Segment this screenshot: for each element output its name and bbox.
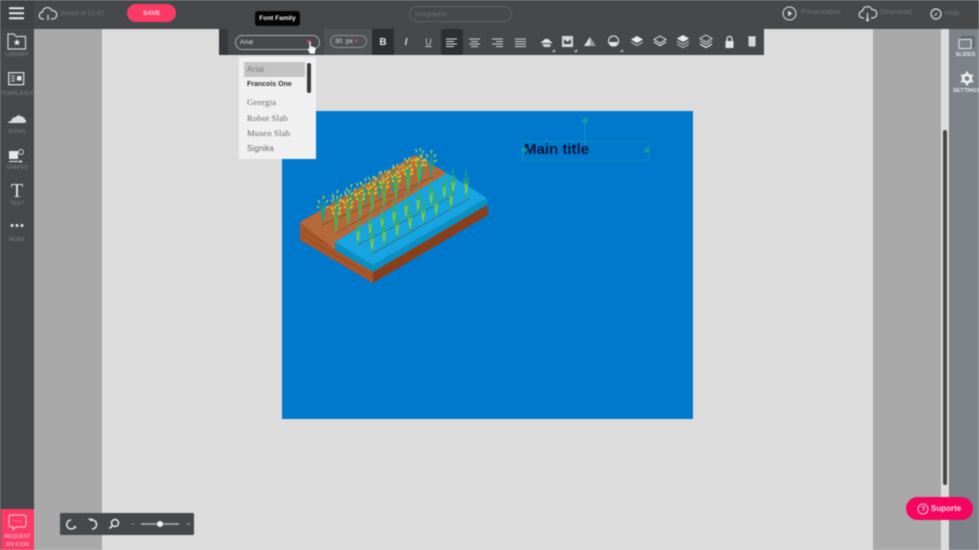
menu corner block	[0, 0, 34, 29]
water top	[335, 173, 487, 265]
save button: SAVE	[143, 10, 160, 17]
title text box	[522, 141, 649, 161]
back row of plants	[317, 150, 437, 222]
icon: image fill	[561, 35, 574, 48]
font size select: 30 px ▾	[335, 38, 358, 45]
selected font row: Arial	[247, 64, 264, 74]
icon: cloud saved	[38, 6, 58, 20]
font size section	[324, 29, 372, 55]
left grey margin	[34, 29, 102, 550]
tooltip: font family	[255, 11, 300, 26]
icon: opacity triangle	[584, 36, 596, 47]
water front side	[335, 198, 487, 272]
zoom toolbar	[60, 513, 194, 535]
presentation button	[782, 6, 840, 22]
download label: Download	[880, 9, 911, 16]
bold button active: B	[379, 37, 387, 48]
right sidebar	[949, 29, 979, 550]
font option: Signika: Signika	[247, 144, 274, 153]
save button	[127, 4, 176, 22]
scrollbar thumb	[307, 63, 311, 93]
menu icon repeat	[8, 6, 25, 20]
tooltip: font family: Font Family	[259, 15, 296, 22]
font option: Georgia: Georgia	[247, 97, 276, 107]
library label: LIBRARY	[5, 52, 29, 58]
selected font row	[244, 62, 305, 77]
icons: layer order	[630, 34, 714, 49]
text label: TEXT	[10, 201, 24, 207]
font option: Robot Slab: Robot Slab	[247, 113, 288, 123]
icon: search	[108, 518, 120, 530]
document name field: Infographic	[415, 11, 447, 18]
help button	[930, 8, 960, 20]
right grey margin	[873, 29, 941, 550]
rotate handle	[521, 118, 650, 153]
icon: question circle	[916, 502, 930, 516]
icon: chat bubble	[8, 514, 28, 532]
icon: stroke	[607, 34, 620, 48]
saved status: Saved at 12:42	[60, 10, 104, 16]
slide: blue infographic canvas	[282, 111, 693, 419]
icon: cloud download	[858, 5, 878, 22]
icon: play	[782, 6, 798, 22]
icon: help	[930, 8, 942, 20]
document name field	[409, 6, 512, 22]
icon: hand cursor	[306, 40, 317, 54]
align left active background	[441, 29, 463, 55]
help label: Help	[945, 10, 959, 17]
main title: Main title	[524, 141, 589, 158]
slides label: SLIDES	[956, 52, 975, 58]
top bar	[0, 0, 979, 29]
icon: shapes	[8, 148, 25, 164]
italic button: I	[405, 37, 407, 48]
font family select: Arial	[240, 39, 253, 46]
download button	[858, 5, 911, 22]
alignment icons	[445, 38, 526, 48]
first water row of plants	[356, 168, 456, 245]
dropdown arrow	[306, 39, 312, 44]
underline button: U	[425, 37, 432, 47]
icon: trash	[748, 36, 756, 48]
icon: templates	[7, 71, 25, 86]
field soil top	[300, 155, 447, 250]
font family select	[235, 35, 320, 50]
field front-left soil side	[300, 222, 373, 283]
templates label: TEMPLATES	[1, 91, 33, 97]
icon corner arrows	[552, 48, 624, 53]
font option: Francois One: Francois One	[247, 81, 292, 88]
zoom slider	[130, 520, 192, 528]
presentation label: Presentation	[801, 9, 840, 16]
request label: AN ICON	[6, 542, 29, 548]
icon: library	[6, 32, 27, 50]
icon: slides	[958, 36, 975, 50]
support button	[906, 497, 973, 520]
request label: REQUEST	[4, 534, 31, 540]
request label	[4, 533, 31, 548]
icon: fill bucket	[540, 38, 554, 48]
icon: more	[10, 223, 24, 228]
icons label: ICONS	[8, 129, 26, 135]
bold button active	[372, 29, 394, 55]
left sidebar	[0, 0, 34, 550]
crop row lines	[322, 177, 470, 254]
icon: animal	[7, 114, 27, 124]
font option: Museo Slab: Museo Slab	[247, 128, 290, 138]
vertical scrollbar	[943, 130, 947, 485]
formatting toolbar	[219, 29, 764, 55]
drag handle	[219, 29, 228, 55]
second water row of plants	[370, 170, 468, 253]
font dropdown menu	[239, 57, 316, 159]
font size select	[330, 35, 367, 48]
request an icon button	[1, 509, 34, 550]
shapes label: SHAPES	[6, 165, 28, 171]
more label: MORE	[9, 237, 25, 243]
front row of ripe plants	[331, 148, 424, 232]
support label: Suporte	[931, 504, 961, 512]
icon: text: T	[11, 180, 23, 202]
icon: lock	[724, 35, 734, 49]
icon: redo	[65, 518, 77, 530]
icon: settings gear	[960, 70, 974, 86]
icon: undo	[88, 518, 98, 530]
soil side under water	[373, 205, 488, 283]
icon: menu	[9, 7, 25, 20]
